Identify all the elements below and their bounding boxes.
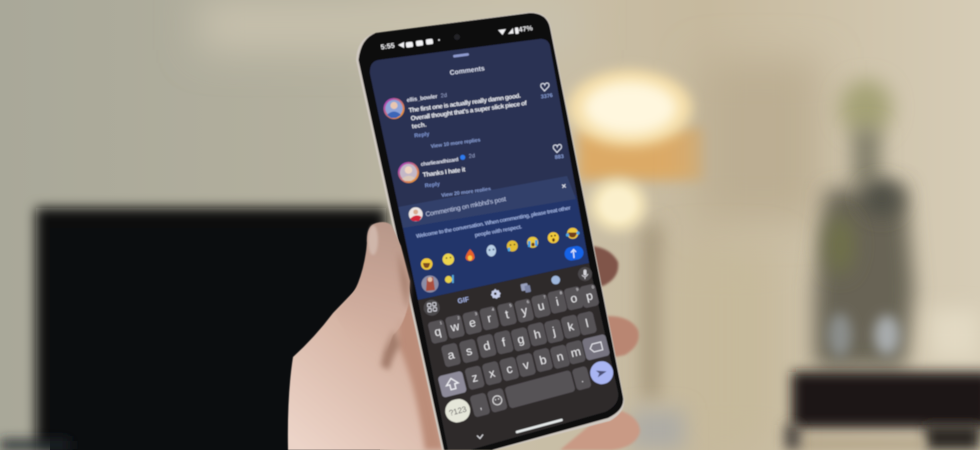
keyboard keys row 1: q — [433, 324, 443, 339]
keyboard keys row 1: e — [467, 315, 477, 330]
keyboard keys row 4: , — [478, 401, 483, 412]
keyboard keys row 2: j — [550, 324, 557, 339]
typed emoji — [445, 276, 452, 283]
crease — [381, 328, 400, 370]
camera — [454, 34, 460, 40]
hand — [288, 246, 640, 450]
comment 2: Thanks I hate it — [422, 166, 467, 179]
keyboard keys row 1: 8 — [559, 290, 563, 295]
keyboard keys row 1: 9 — [576, 286, 580, 292]
close x: × — [561, 181, 567, 191]
nav chevron — [477, 434, 483, 438]
commenting banner: Commenting on mkbhd's post — [425, 196, 507, 218]
user avatar — [422, 276, 438, 292]
keyboard keys row 2: f — [500, 335, 508, 349]
keyboard keys row 4: ?123 — [448, 404, 468, 418]
phone black body — [358, 13, 623, 450]
send button — [563, 245, 585, 262]
keyboard keys row 2: k — [566, 319, 576, 334]
keyboard keys row 1: 1 — [439, 320, 443, 325]
keyboard keys row 3: n — [555, 349, 565, 364]
keyboard keys row 1: 6 — [526, 299, 530, 304]
sheet handle — [453, 53, 469, 58]
keyboard keys row 1: 5 — [509, 302, 513, 308]
television — [0, 208, 386, 450]
keyboard keys row 1: r — [486, 311, 493, 326]
keyboard keys row 1: 3 — [474, 311, 478, 316]
keyboard keys row 3: z — [470, 370, 479, 385]
comment 1: tech. — [411, 122, 427, 130]
keyboard keys row 1: t — [504, 307, 511, 321]
keyboard keys row 1: o — [569, 291, 579, 306]
keyboard keys row 1: p — [584, 288, 594, 304]
comment 2 — [398, 144, 564, 199]
comment 1: Overall thought that's a super slick piece of — [410, 100, 528, 122]
lamp glow top — [568, 70, 692, 146]
comment 1: Reply — [414, 131, 431, 139]
status bar: 5:55 — [380, 43, 395, 51]
keyboard keys row 1: w — [448, 319, 461, 335]
keyboard keys row 2: g — [516, 332, 526, 347]
comment 2: 883 — [554, 154, 564, 161]
comment 2: View 20 more replies — [441, 186, 491, 199]
keyboard keys row 2 — [441, 311, 597, 368]
comment 1: 2d — [440, 93, 447, 99]
keyboard keys row 2: s — [464, 343, 474, 359]
comment 2: 2d — [468, 153, 475, 160]
community note: Welcome to the conversation. When commenting, please treat other — [416, 205, 572, 240]
comment 1 — [384, 83, 553, 150]
keyboard keys row 2: h — [532, 327, 542, 342]
palm shadow near phone — [398, 300, 444, 450]
keyboard keys row 3: x — [487, 366, 497, 381]
avatar — [384, 98, 404, 119]
lamp glow bottom — [590, 179, 646, 231]
keyboard keys row 1: 4 — [491, 306, 495, 312]
comment 1: 3376 — [540, 93, 553, 100]
phone metal frame — [356, 12, 624, 450]
comment 2: charlieandhizard — [420, 157, 459, 168]
keyboard keys row 3: m — [569, 344, 582, 360]
home indicator — [517, 420, 562, 432]
mic button — [578, 267, 592, 281]
right wall glow — [930, 310, 980, 360]
avatar — [398, 162, 419, 183]
palm — [288, 285, 445, 450]
community note: people with respect. — [474, 224, 523, 239]
dark table — [785, 372, 980, 450]
keyboard keys row 1: y — [520, 303, 529, 318]
heading: Comments: Comments — [449, 65, 485, 77]
keyboard keys row 3: b — [538, 352, 548, 368]
keyboard keys row 2: l — [584, 316, 590, 330]
finger 3 — [560, 411, 640, 450]
comment 1: The first one is actually really damn good. — [408, 93, 521, 114]
plant — [815, 80, 914, 367]
keyboard keys row 1: u — [536, 298, 546, 314]
lamp pole — [645, 225, 659, 400]
keyboard keys row 1: i — [554, 295, 560, 309]
thumb over phone edge — [335, 222, 410, 362]
keyboard keys row 4: . — [579, 374, 585, 385]
keyboard keys row 2: a — [446, 347, 456, 363]
emoji row — [421, 228, 580, 270]
keyboard keys row 2: d — [482, 338, 492, 354]
finger 2 — [605, 316, 639, 358]
comment 2: Reply — [424, 181, 441, 189]
comment 1: View 10 more replies — [430, 137, 481, 150]
screen: comments panel — [370, 39, 589, 300]
status bar — [380, 25, 534, 51]
keyboard keys row 1: 0 — [591, 284, 595, 290]
keyboard keys row 4 — [443, 359, 616, 425]
keyboard toolbar: GIF — [457, 296, 471, 305]
keyboard keys row 3: v — [521, 357, 531, 373]
keyboard keys row 1: 7 — [543, 294, 547, 300]
finger 1 — [590, 246, 618, 290]
keyboard panel — [418, 263, 618, 450]
status bar: 47% — [518, 25, 534, 34]
phone — [356, 12, 624, 450]
lamp shade — [578, 128, 705, 180]
keyboard keys row 1: 2 — [457, 315, 461, 320]
commenting banner — [398, 176, 576, 228]
keyboard toolbar — [424, 276, 560, 316]
keyboard keys row 3: c — [505, 361, 514, 377]
small avatar — [409, 207, 423, 221]
composer section background — [403, 195, 589, 300]
keyboard keys row 3 — [438, 334, 610, 398]
keyboard keys row 1 — [427, 283, 600, 344]
comment 1: ellis_bowler — [406, 94, 439, 104]
